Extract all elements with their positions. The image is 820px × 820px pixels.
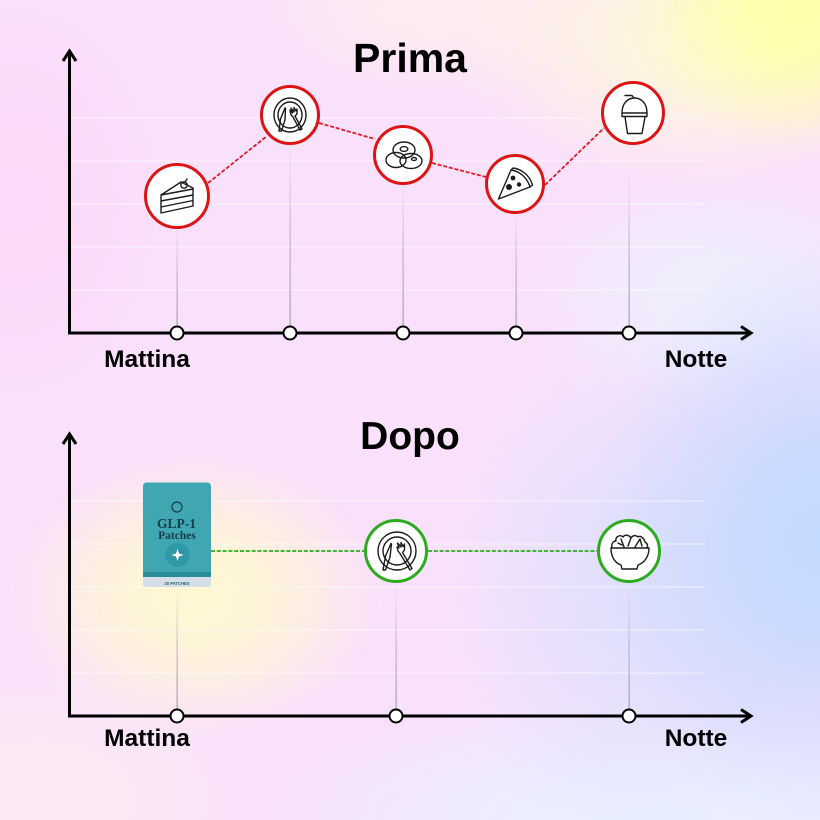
label: Notte: Notte <box>665 725 727 752</box>
label: Notte: Notte <box>665 346 727 373</box>
label: Mattina: Mattina <box>104 346 190 373</box>
icon: cake <box>146 164 208 228</box>
icon: plate and cutlery <box>366 520 426 582</box>
icon: drink cup <box>602 82 664 144</box>
red dashed connector <box>208 123 604 185</box>
axis markers <box>170 710 636 722</box>
icon: plate and cutlery <box>262 86 318 144</box>
axes <box>63 51 751 340</box>
title: Prima: Prima <box>353 35 468 81</box>
panel: Prima chart <box>63 51 751 373</box>
axis markers <box>170 326 636 340</box>
product: GLP-1 Patches pouch: GLP-1 <box>157 516 196 531</box>
green dashed connector <box>211 550 598 552</box>
title: Dopo: Dopo <box>360 415 460 458</box>
panel: Dopo chart <box>63 434 751 752</box>
product: GLP-1 Patches pouch: 30 PATCHES <box>164 581 190 586</box>
icon: salad bowl <box>598 520 660 582</box>
product: GLP-1 Patches pouch: Patches <box>158 530 196 542</box>
icon: donuts <box>374 126 432 184</box>
icon: pizza <box>486 156 544 212</box>
axes <box>63 434 751 722</box>
label: Mattina: Mattina <box>104 725 190 752</box>
product: GLP-1 Patches pouch <box>143 482 211 587</box>
